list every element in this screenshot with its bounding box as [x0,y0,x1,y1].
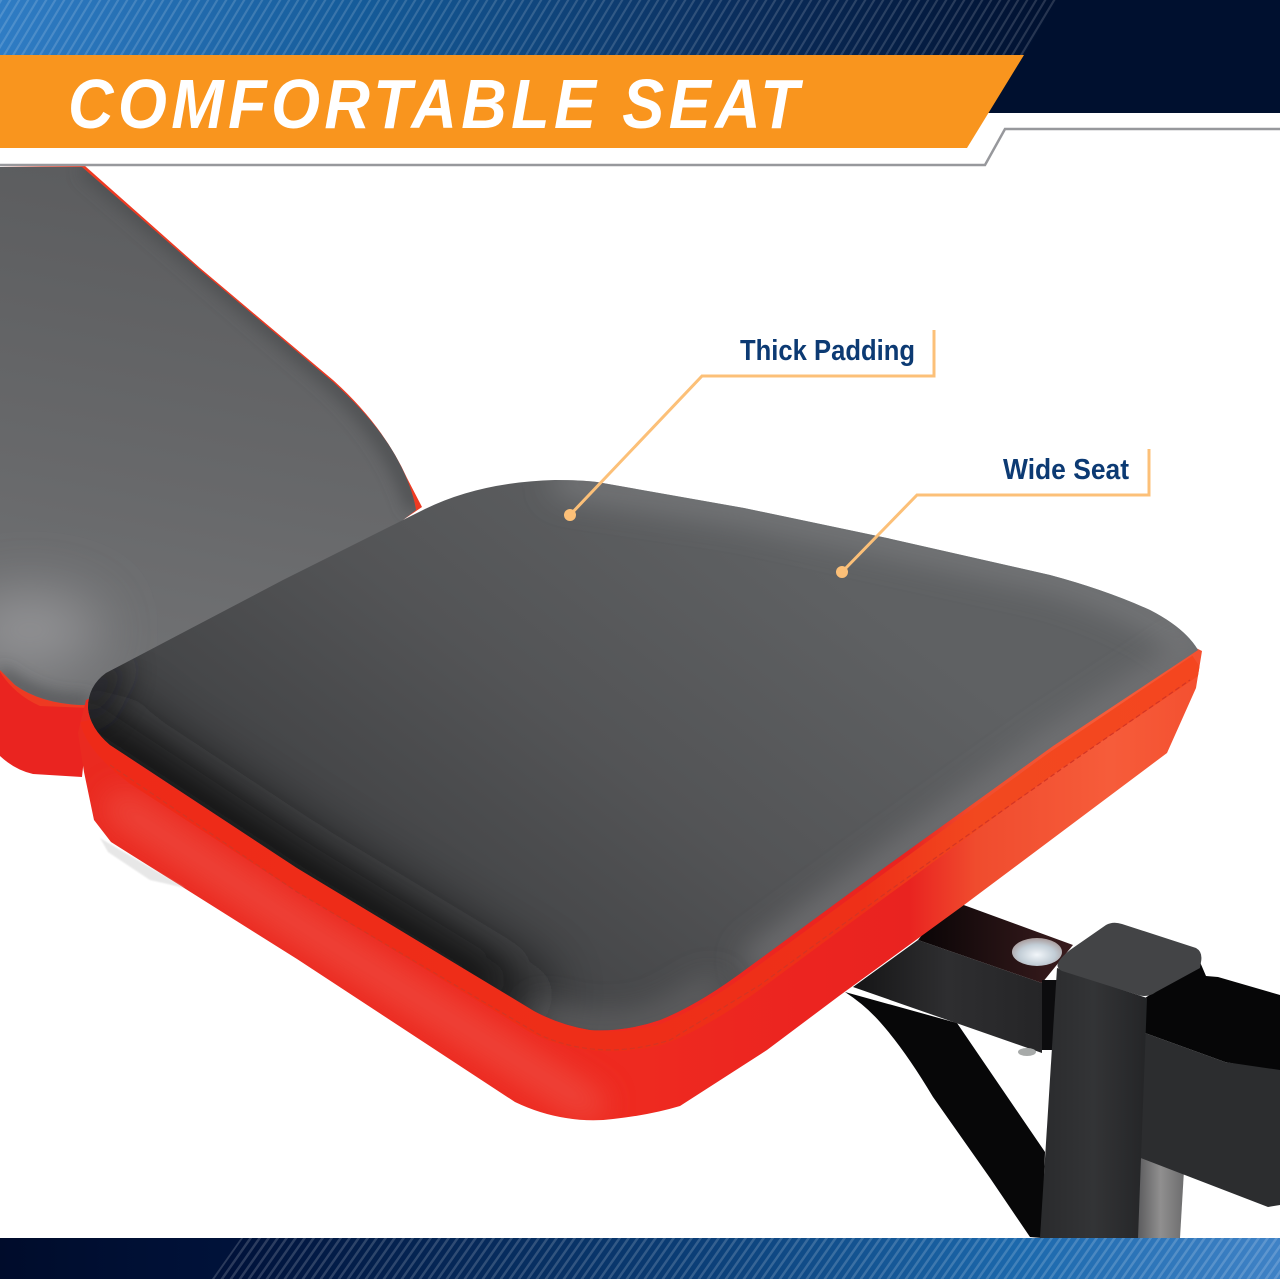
white underlay [0,113,1280,165]
leader line [570,330,934,515]
seat top: black vinyl [70,470,1210,1040]
callout: wide seat [836,449,1149,578]
frame: upper arm [853,900,1073,1056]
leader line [842,449,1149,572]
header band [0,0,1280,165]
frame: accessory holder [1138,962,1280,1207]
callout: thick padding [564,330,934,521]
title: COMFORTABLE SEAT [68,66,804,144]
floor shadow under seat [100,838,185,888]
frame: rear leg [1137,1155,1184,1238]
label: Wide Seat [1003,454,1129,486]
footer stripes [212,1238,1280,1279]
seat side: red vinyl [83,648,1202,1120]
frame: upright post [1040,968,1147,1238]
marker dot [564,509,576,521]
backrest pad [0,160,430,777]
header navy block [950,0,1280,113]
grey rule [0,129,1280,165]
label: Thick Padding [740,335,915,367]
seat side: stitch line [110,680,1190,1050]
footer band [0,1238,1280,1279]
frame: post end cap [1058,923,1201,996]
header stripes [0,0,1057,56]
header blue gradient [0,0,1057,56]
orange title banner [0,55,1024,148]
seat pad [70,470,1210,1130]
marker dot [836,566,848,578]
frame: angled brace [845,992,1045,1238]
